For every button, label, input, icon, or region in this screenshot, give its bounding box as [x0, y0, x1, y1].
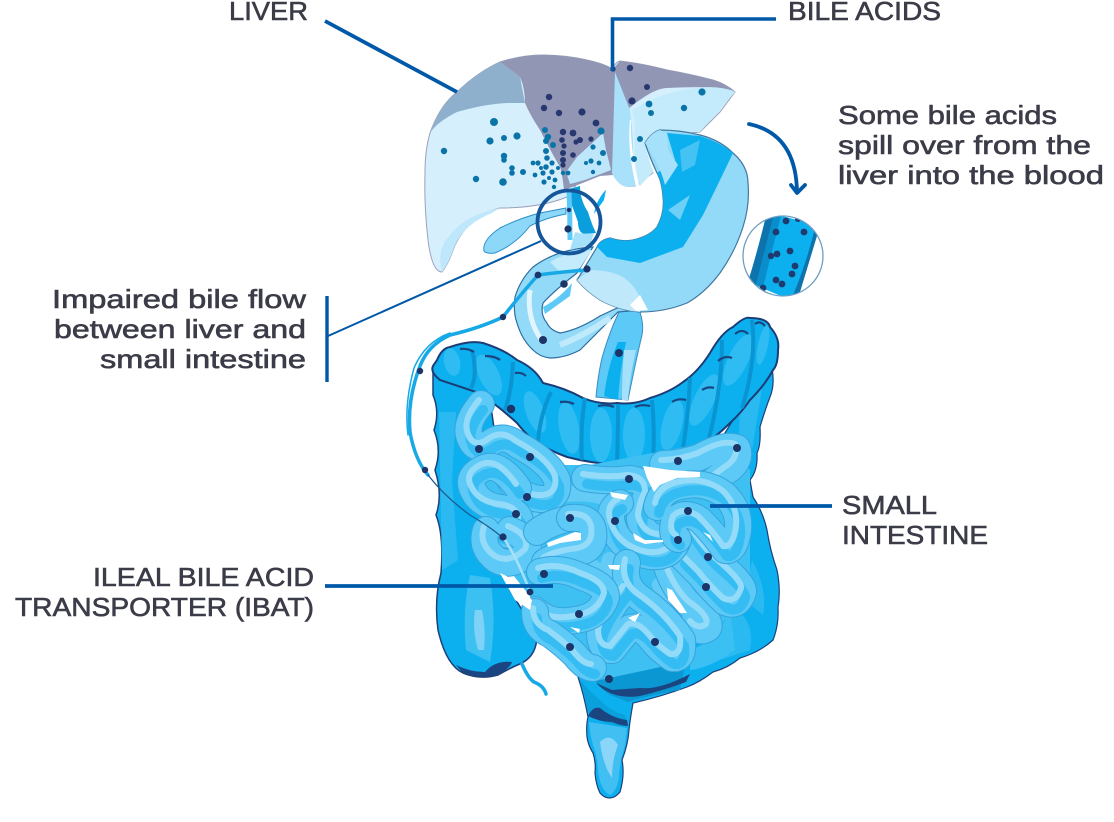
text: impaired bile flow [52, 284, 306, 374]
liver purple shaded top [500, 55, 735, 190]
tube: central loop [609, 499, 680, 562]
text: bile acids spill over [838, 100, 1104, 190]
text: impaired bile flow: between liver and [54, 314, 306, 344]
tube: ileum [533, 566, 608, 627]
bile acid dots: liver teal [441, 88, 706, 189]
leader line: small intestine [710, 504, 832, 508]
tube: right coil [681, 523, 745, 610]
bile acid dots: liver dark [541, 65, 650, 168]
colon right panels [713, 560, 764, 660]
tube: lower centre loop [598, 559, 684, 664]
text: impaired bile flow: Impaired bile flow [52, 284, 306, 314]
stomach lighter upper left [645, 130, 678, 185]
stomach blue band [597, 133, 733, 263]
falciform ligament lobe [612, 72, 640, 187]
transverse colon [432, 318, 778, 465]
transverse colon haustra highlights [441, 324, 772, 462]
text: bile acids spill over: Some bile acids [838, 100, 1057, 130]
text: bile acids spill over: liver into the blood [838, 160, 1104, 190]
organ: large intestine [432, 318, 779, 798]
label: ileal bile acid transporter [15, 562, 314, 622]
transverse colon dark creases [460, 322, 765, 407]
inset: bile acids in blood vessel [743, 212, 823, 302]
small intestine backing [467, 425, 750, 680]
tube: right rear loop [665, 563, 709, 630]
text: impaired bile flow: small intestine [100, 344, 306, 374]
label: ileal bile acid transporter: ILEAL BILE ACID [93, 562, 314, 592]
tube: central top [583, 474, 662, 544]
leader line: bile acids [612, 19, 776, 71]
stomach body [577, 130, 748, 312]
descending jejunum [596, 310, 643, 400]
rectum highlight [589, 722, 627, 795]
illustration: digestive organs [407, 55, 823, 798]
label: small intestine: SMALL [842, 490, 937, 520]
bile acid dots: ducts and intestines [417, 208, 741, 683]
organ: duodenum and jejunum [514, 247, 643, 400]
descending colon and sigmoid [578, 368, 779, 798]
sigmoid shading [590, 642, 690, 702]
circle: impaired bile flow region [538, 190, 600, 254]
organ: stomach [577, 130, 748, 312]
leader line: IBAT [325, 584, 553, 588]
tube: middle coil [537, 514, 593, 562]
lower liver edge [440, 208, 500, 272]
leader line: liver [325, 21, 457, 92]
vessel carrying bile acids [407, 270, 587, 592]
tube: upper right segment [661, 443, 738, 482]
organ: small intestine [466, 400, 750, 680]
ascending colon and cecum [433, 372, 537, 677]
organ: liver [425, 55, 735, 272]
small intestine back loops [535, 493, 700, 625]
transverse colon folds [471, 320, 753, 464]
duodenum loop [514, 247, 640, 358]
gaps between loops [500, 466, 713, 633]
label: small intestine: INTESTINE [842, 520, 988, 550]
liver silhouette [425, 55, 735, 272]
appendix [522, 664, 546, 694]
tube: left coil [469, 463, 522, 541]
bile ducts and pancreas [566, 186, 606, 250]
text: bile acids spill over: spill over from the [838, 130, 1091, 160]
label: ileal bile acid transporter: TRANSPORTER (IBAT) [15, 592, 314, 622]
label: small intestine [842, 490, 988, 550]
liver grey-blue shadow [430, 62, 525, 133]
tube: upper left loop [466, 400, 559, 505]
tube: right large loop [655, 480, 740, 556]
leader bracket: impaired bile flow [327, 241, 541, 382]
liver inner light lobe [566, 133, 611, 184]
tube: terminal ileum [533, 608, 595, 674]
arrow: bile acids spill into the blood [749, 124, 805, 193]
right lobe tint [632, 87, 735, 186]
cecum shading [439, 412, 512, 677]
gallbladder [484, 208, 566, 253]
tube: lower left coil [482, 526, 528, 563]
stomach pale bottom [577, 270, 641, 312]
